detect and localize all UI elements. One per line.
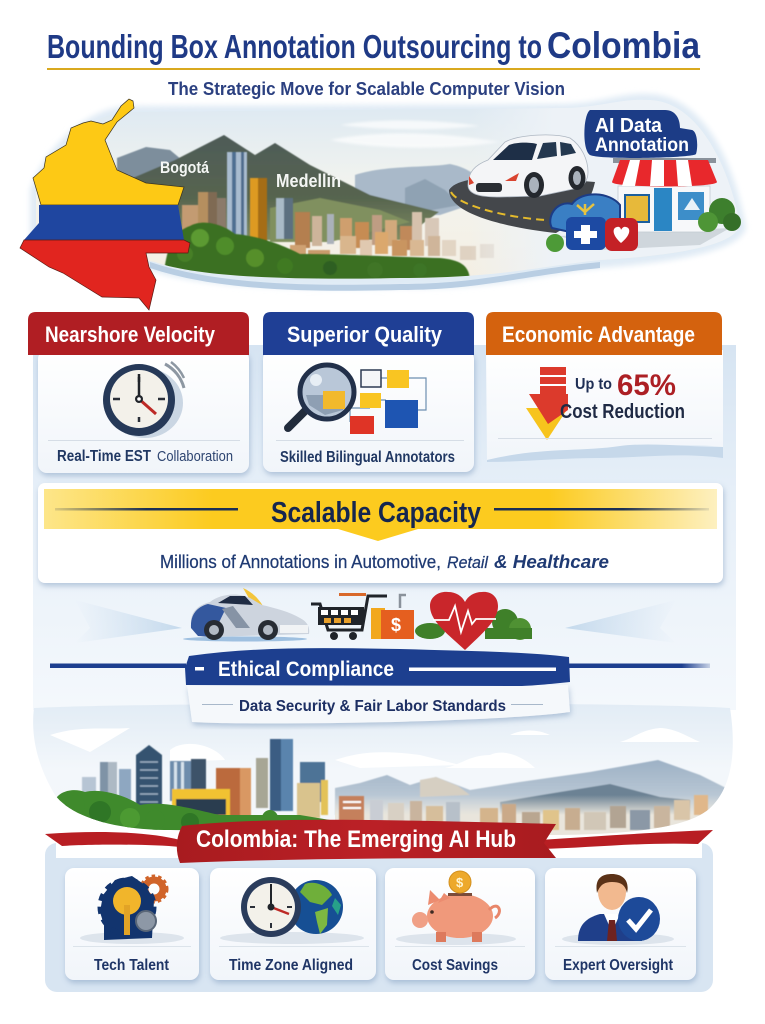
icon: heart with pulse — [430, 592, 498, 650]
right side wedge — [565, 600, 676, 643]
town haze — [335, 795, 730, 835]
map of Colombia — [20, 99, 190, 310]
industry icons — [183, 588, 532, 650]
subtitle: The Strategic Move for Scalable Computer Vision — [168, 79, 565, 99]
icon: cart — [311, 593, 387, 640]
cost reduction text: Up to — [575, 376, 612, 393]
icon: clock — [103, 362, 184, 438]
AI Data Annotation tag: AI Data — [595, 115, 663, 137]
cost reduction text: 65% — [617, 369, 676, 402]
AI Data Annotation tag — [584, 110, 697, 158]
caption: Real-Time EST — [57, 448, 151, 465]
icon: bushes — [415, 609, 532, 640]
car — [468, 135, 588, 198]
city buildings — [182, 152, 494, 264]
hero scene — [20, 95, 750, 285]
caption: Skilled Bilingual Annotators — [280, 449, 455, 466]
Ethical Compliance banner — [50, 648, 710, 724]
icon: clock — [241, 877, 301, 937]
caption — [57, 448, 233, 465]
icon: expert with check badge — [578, 874, 660, 941]
wispy clouds — [330, 121, 500, 148]
card: Time Zone Aligned: Time Zone Aligned — [229, 957, 353, 974]
card: Time Zone Aligned — [210, 868, 376, 980]
main light blue panel — [33, 345, 736, 710]
hero backdrop — [30, 94, 746, 289]
card: Tech Talent — [65, 868, 199, 980]
bottom panel background — [45, 843, 713, 992]
card: Economic Advantage — [486, 312, 723, 462]
header — [486, 312, 722, 355]
cost reduction text: Cost Reduction — [560, 401, 685, 423]
Colombia: The Emerging AI Hub ribbon — [45, 820, 713, 863]
Ethical Compliance banner: Ethical Compliance — [218, 658, 394, 681]
icon: down arrow — [526, 367, 568, 440]
header — [263, 312, 474, 355]
distant mountains — [117, 135, 500, 242]
description — [160, 552, 609, 572]
cost reduction text — [560, 369, 685, 423]
description: Retail — [447, 553, 489, 572]
road — [449, 176, 595, 233]
title: Colombia — [547, 25, 700, 66]
skyline buildings — [82, 735, 708, 830]
card: Superior Quality — [263, 312, 474, 472]
gold band — [44, 489, 717, 541]
icon: shopping bag: $ — [391, 615, 401, 635]
card: Expert Oversight — [545, 868, 696, 980]
icon: shopping bag — [371, 595, 414, 639]
card: Nearshore Velocity — [28, 312, 249, 473]
labels on hero: Bogotá — [160, 158, 209, 177]
icon: piggy bank — [412, 871, 499, 942]
title: Bounding Box Annotation Outsourcing to — [47, 28, 542, 65]
icon: magnifier and boxes — [288, 365, 426, 434]
AI Data Annotation tag: Annotation — [595, 135, 689, 156]
description: & Healthcare — [494, 552, 609, 572]
card: Expert Oversight: Expert Oversight — [563, 957, 674, 974]
details card — [187, 685, 570, 724]
details card: Data Security & Fair Labor Standards — [239, 698, 506, 715]
skyline scene — [33, 704, 733, 840]
mountains — [335, 760, 730, 815]
card: Tech Talent: Tech Talent — [94, 957, 170, 974]
right side haze — [488, 100, 738, 272]
healthcare icons — [546, 194, 638, 252]
left side wedge — [75, 600, 182, 643]
hero banner: Medellin — [276, 171, 341, 191]
icon: piggy bank: $ — [456, 875, 464, 890]
card: Scalable Capacity — [38, 483, 723, 583]
hero banner — [20, 94, 750, 291]
heading: Scalable Capacity — [271, 497, 481, 529]
clouds — [50, 728, 700, 768]
main mountain — [128, 135, 439, 240]
description: Millions of Annotations in Automotive, — [160, 552, 441, 572]
blue ribbon — [185, 648, 570, 686]
Colombia: The Emerging AI Hub ribbon: Colombia: The Emerging AI Hub — [196, 826, 516, 853]
icon: car — [183, 588, 309, 642]
caption: Collaboration — [157, 448, 233, 465]
trees — [160, 223, 470, 282]
shop — [560, 158, 741, 250]
card: Cost Savings — [385, 868, 535, 980]
trees — [56, 790, 330, 830]
header — [28, 312, 249, 355]
icon: globe — [289, 880, 343, 934]
card: Economic Advantage: Economic Advantage — [502, 322, 695, 347]
card: Cost Savings: Cost Savings — [412, 957, 498, 974]
card: Superior Quality: Superior Quality — [287, 322, 443, 347]
icon: gear head — [100, 876, 167, 940]
card: Nearshore Velocity: Nearshore Velocity — [45, 322, 216, 347]
